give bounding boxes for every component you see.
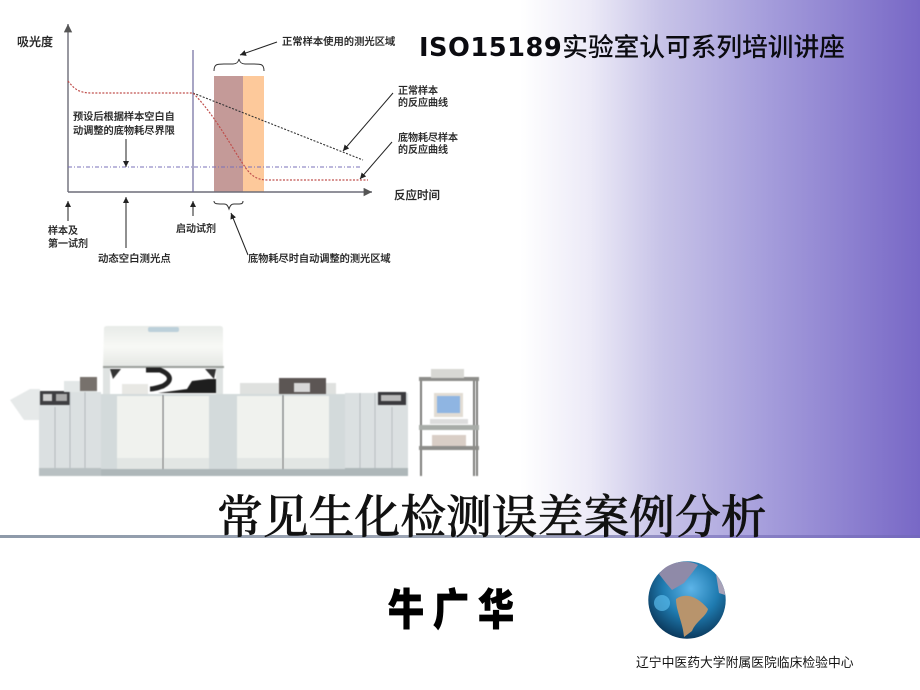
main title: 常见生化检测误差案例分析 [217,481,767,547]
institution caption: 辽宁中医药大学附属医院临床检验中心 [636,652,854,671]
depletion threshold line [68,166,362,168]
sample loader [10,389,40,420]
chart labels: 正常样本 [398,82,438,97]
center front cabinets [101,394,223,476]
chart labels: 样本及 [48,222,78,237]
chart labels: 底物耗尽时自动调整的测光区域 [248,250,391,265]
normal sample curve [193,93,363,160]
divider rule [0,535,920,538]
computer cart [419,369,479,476]
measuring zones [214,76,264,192]
chart labels: 动调整的底物耗尽界限 [73,122,175,137]
chart labels: 预设后根据样本空白自 [73,108,175,123]
chart labels: 底物耗尽样本 [398,129,458,144]
chart labels: 动态空白测光点 [98,250,171,265]
analyzer machine [10,326,480,477]
left cabinets [39,377,101,476]
main hood [103,326,224,368]
right front cabinets [223,394,345,476]
reaction curve chart [17,24,458,265]
reagent start line [192,50,194,192]
open work area [103,368,223,394]
depleted sample curve [68,81,368,180]
chart labels: 第一试剂 [48,235,88,250]
chart labels: 反应时间 [394,187,440,203]
chart labels: 吸光度 [17,33,53,50]
author name: 牛广华 [388,576,523,638]
far right cabinets [345,392,408,476]
axes [68,24,372,192]
bottom brace [214,201,243,209]
chart labels: 的反应曲线 [398,94,448,109]
right top reagents [240,378,336,394]
icon: globe [648,561,726,639]
header title: ISO15189实验室认可系列培训讲座 [419,27,845,64]
chart labels [17,33,458,265]
chart labels: 正常样本使用的测光区域 [282,33,395,48]
chart labels: 启动试剂 [176,220,216,235]
chart labels: 的反应曲线 [398,141,448,156]
top brace [214,59,264,71]
gradient background [0,0,920,536]
callout arrows [68,42,393,255]
